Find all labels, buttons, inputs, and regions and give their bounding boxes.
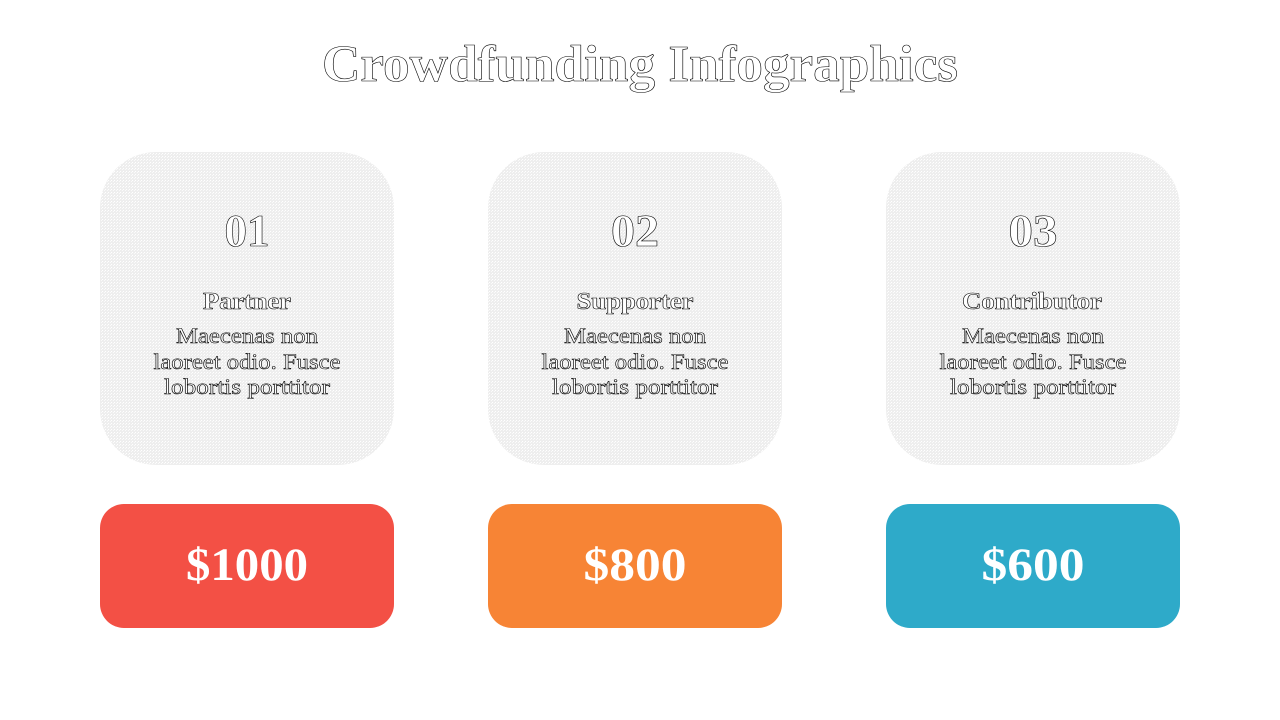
panel background: partner bbox=[100, 152, 394, 465]
price box: $800: $800 bbox=[584, 539, 686, 591]
description: supporter: laoreet odio. Fusce bbox=[542, 349, 728, 374]
price box: $800 bbox=[488, 504, 782, 628]
description: supporter: lobortis porttitor bbox=[552, 374, 719, 399]
description: contributor: laoreet odio. Fusce bbox=[940, 349, 1126, 374]
description: supporter: Maecenas non bbox=[564, 323, 706, 348]
heading: Contributor: Contributor bbox=[962, 289, 1102, 315]
description: contributor bbox=[940, 323, 1126, 399]
price box: $600 bbox=[886, 504, 1180, 628]
price box: $1000 bbox=[100, 504, 394, 628]
number 01: 01 bbox=[224, 205, 270, 256]
number 02: 02 bbox=[611, 205, 659, 256]
heading: Partner: Partner bbox=[203, 289, 291, 315]
price box: $600: $600 bbox=[982, 539, 1084, 591]
number 03: 03 bbox=[1008, 205, 1058, 256]
title: Crowdfunding Infographics bbox=[322, 36, 958, 93]
description: partner: Maecenas non bbox=[176, 323, 318, 348]
panel: supporter bbox=[488, 152, 782, 465]
panel: partner bbox=[100, 152, 394, 465]
description: partner bbox=[154, 323, 340, 399]
price box: $1000: $1000 bbox=[186, 539, 308, 591]
description: contributor: Maecenas non bbox=[962, 323, 1104, 348]
description: partner: lobortis porttitor bbox=[164, 374, 331, 399]
description: contributor: lobortis porttitor bbox=[950, 374, 1117, 399]
panel: contributor bbox=[886, 152, 1180, 465]
description: partner: laoreet odio. Fusce bbox=[154, 349, 340, 374]
description: supporter bbox=[542, 323, 728, 399]
panel background: contributor bbox=[886, 152, 1180, 465]
heading: Supporter: Supporter bbox=[576, 289, 694, 315]
panel background: supporter bbox=[488, 152, 782, 465]
